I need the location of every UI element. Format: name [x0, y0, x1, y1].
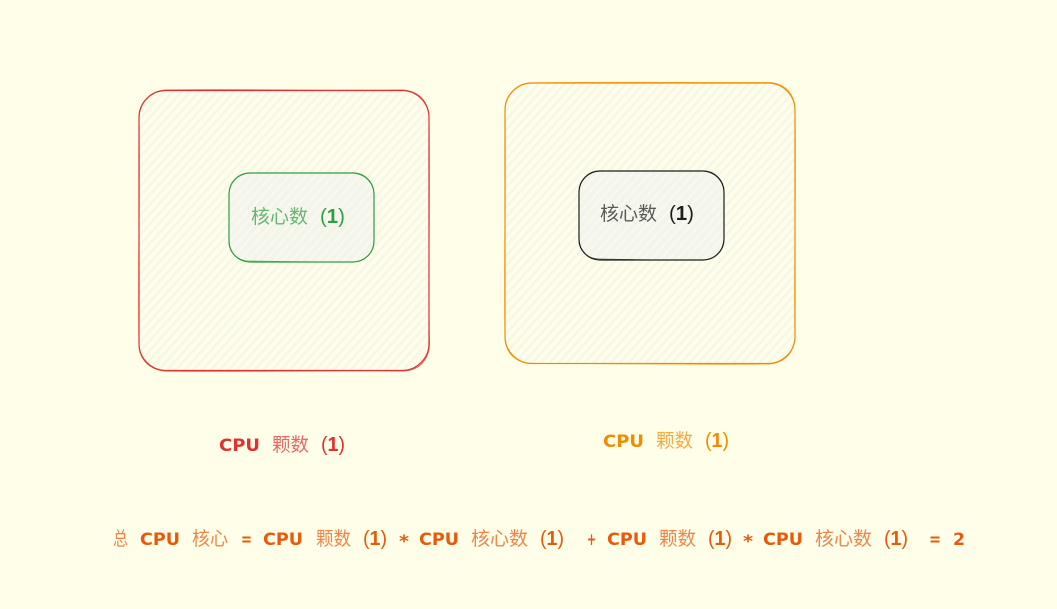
- label: black core count: [600, 199, 694, 226]
- formula: total CPU cores: CPU: [263, 530, 303, 550]
- formula: total CPU cores: (1): [363, 528, 387, 550]
- label: red CPU count: 颗数: [272, 430, 309, 457]
- formula: total CPU cores: 核心数: [471, 524, 528, 551]
- panel: black core box: [579, 171, 724, 260]
- formula: total CPU cores: *: [743, 532, 753, 552]
- label: black core count: (1): [669, 203, 694, 225]
- formula: total CPU cores: =: [241, 530, 252, 550]
- label: black core count: 核心数: [600, 199, 657, 226]
- formula: total CPU cores: CPU: [419, 530, 459, 550]
- formula: total CPU cores: (1): [540, 528, 564, 550]
- formula: total CPU cores: *: [399, 532, 409, 552]
- formula: total CPU cores: (1): [708, 528, 732, 550]
- formula: total CPU cores: +: [587, 530, 596, 550]
- label: red CPU count: CPU: [219, 436, 260, 456]
- label: green core count: 核心数: [251, 202, 308, 229]
- formula: total CPU cores: 颗数: [316, 524, 351, 551]
- panel: green core box: [229, 173, 374, 262]
- formula: total CPU cores: =: [929, 530, 941, 550]
- formula: total CPU cores: [113, 524, 965, 552]
- label: orange CPU count: CPU: [603, 432, 644, 452]
- label: red CPU count: (1): [321, 434, 345, 456]
- panel: red CPU box: [139, 90, 430, 371]
- formula: total CPU cores: 核心数: [815, 524, 872, 551]
- panel: orange CPU box: [505, 82, 795, 364]
- formula: total CPU cores: CPU: [607, 530, 647, 550]
- label: green core count: (1): [320, 206, 345, 228]
- formula: total CPU cores: (1): [884, 528, 908, 550]
- label: orange CPU count: [603, 426, 729, 453]
- label: green core count: [251, 202, 345, 229]
- formula: total CPU cores: 核心: [192, 524, 228, 551]
- formula: total CPU cores: 总: [113, 524, 128, 551]
- label: orange CPU count: 颗数: [656, 426, 693, 453]
- label: orange CPU count: (1): [705, 430, 729, 452]
- formula: total CPU cores: CPU: [140, 530, 180, 550]
- label: red CPU count: [219, 430, 345, 457]
- formula: total CPU cores: 颗数: [659, 524, 696, 551]
- formula: total CPU cores: 2: [953, 530, 965, 550]
- formula: total CPU cores: CPU: [763, 530, 803, 550]
